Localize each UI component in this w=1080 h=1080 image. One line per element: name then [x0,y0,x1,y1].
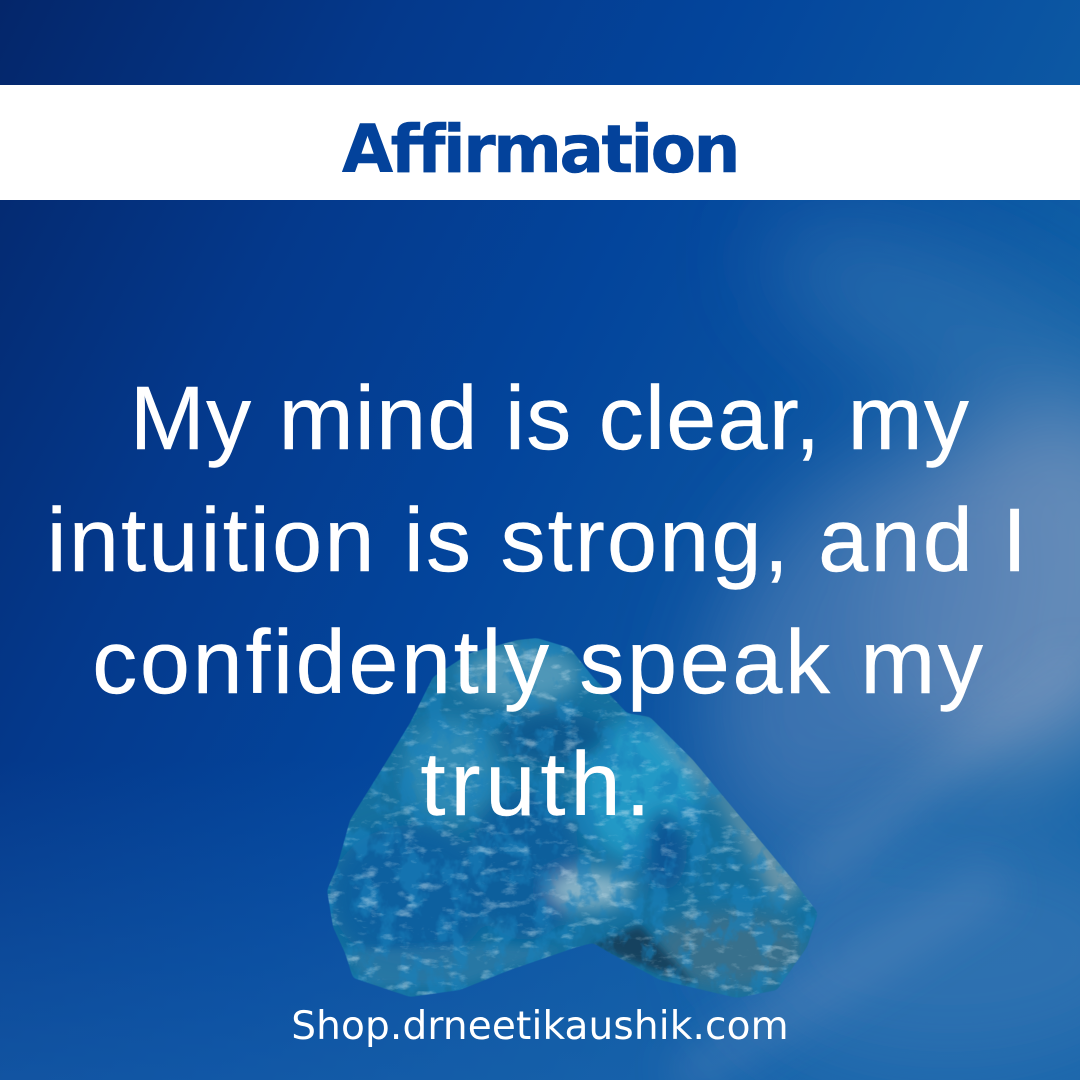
top header band [0,85,1080,200]
affirmation text: intuition is strong, and I [47,491,1029,591]
affirmation text [47,369,1029,835]
affirmation text: My mind is clear, my [130,369,970,469]
icon: blue apatite stone [327,638,818,998]
affirmation text: truth. [420,735,656,835]
heading: Affirmation: Affirmation [342,111,738,188]
website link: Shop.drneetikaushik.com [291,1004,789,1049]
affirmation text: confidently speak my [92,613,986,713]
